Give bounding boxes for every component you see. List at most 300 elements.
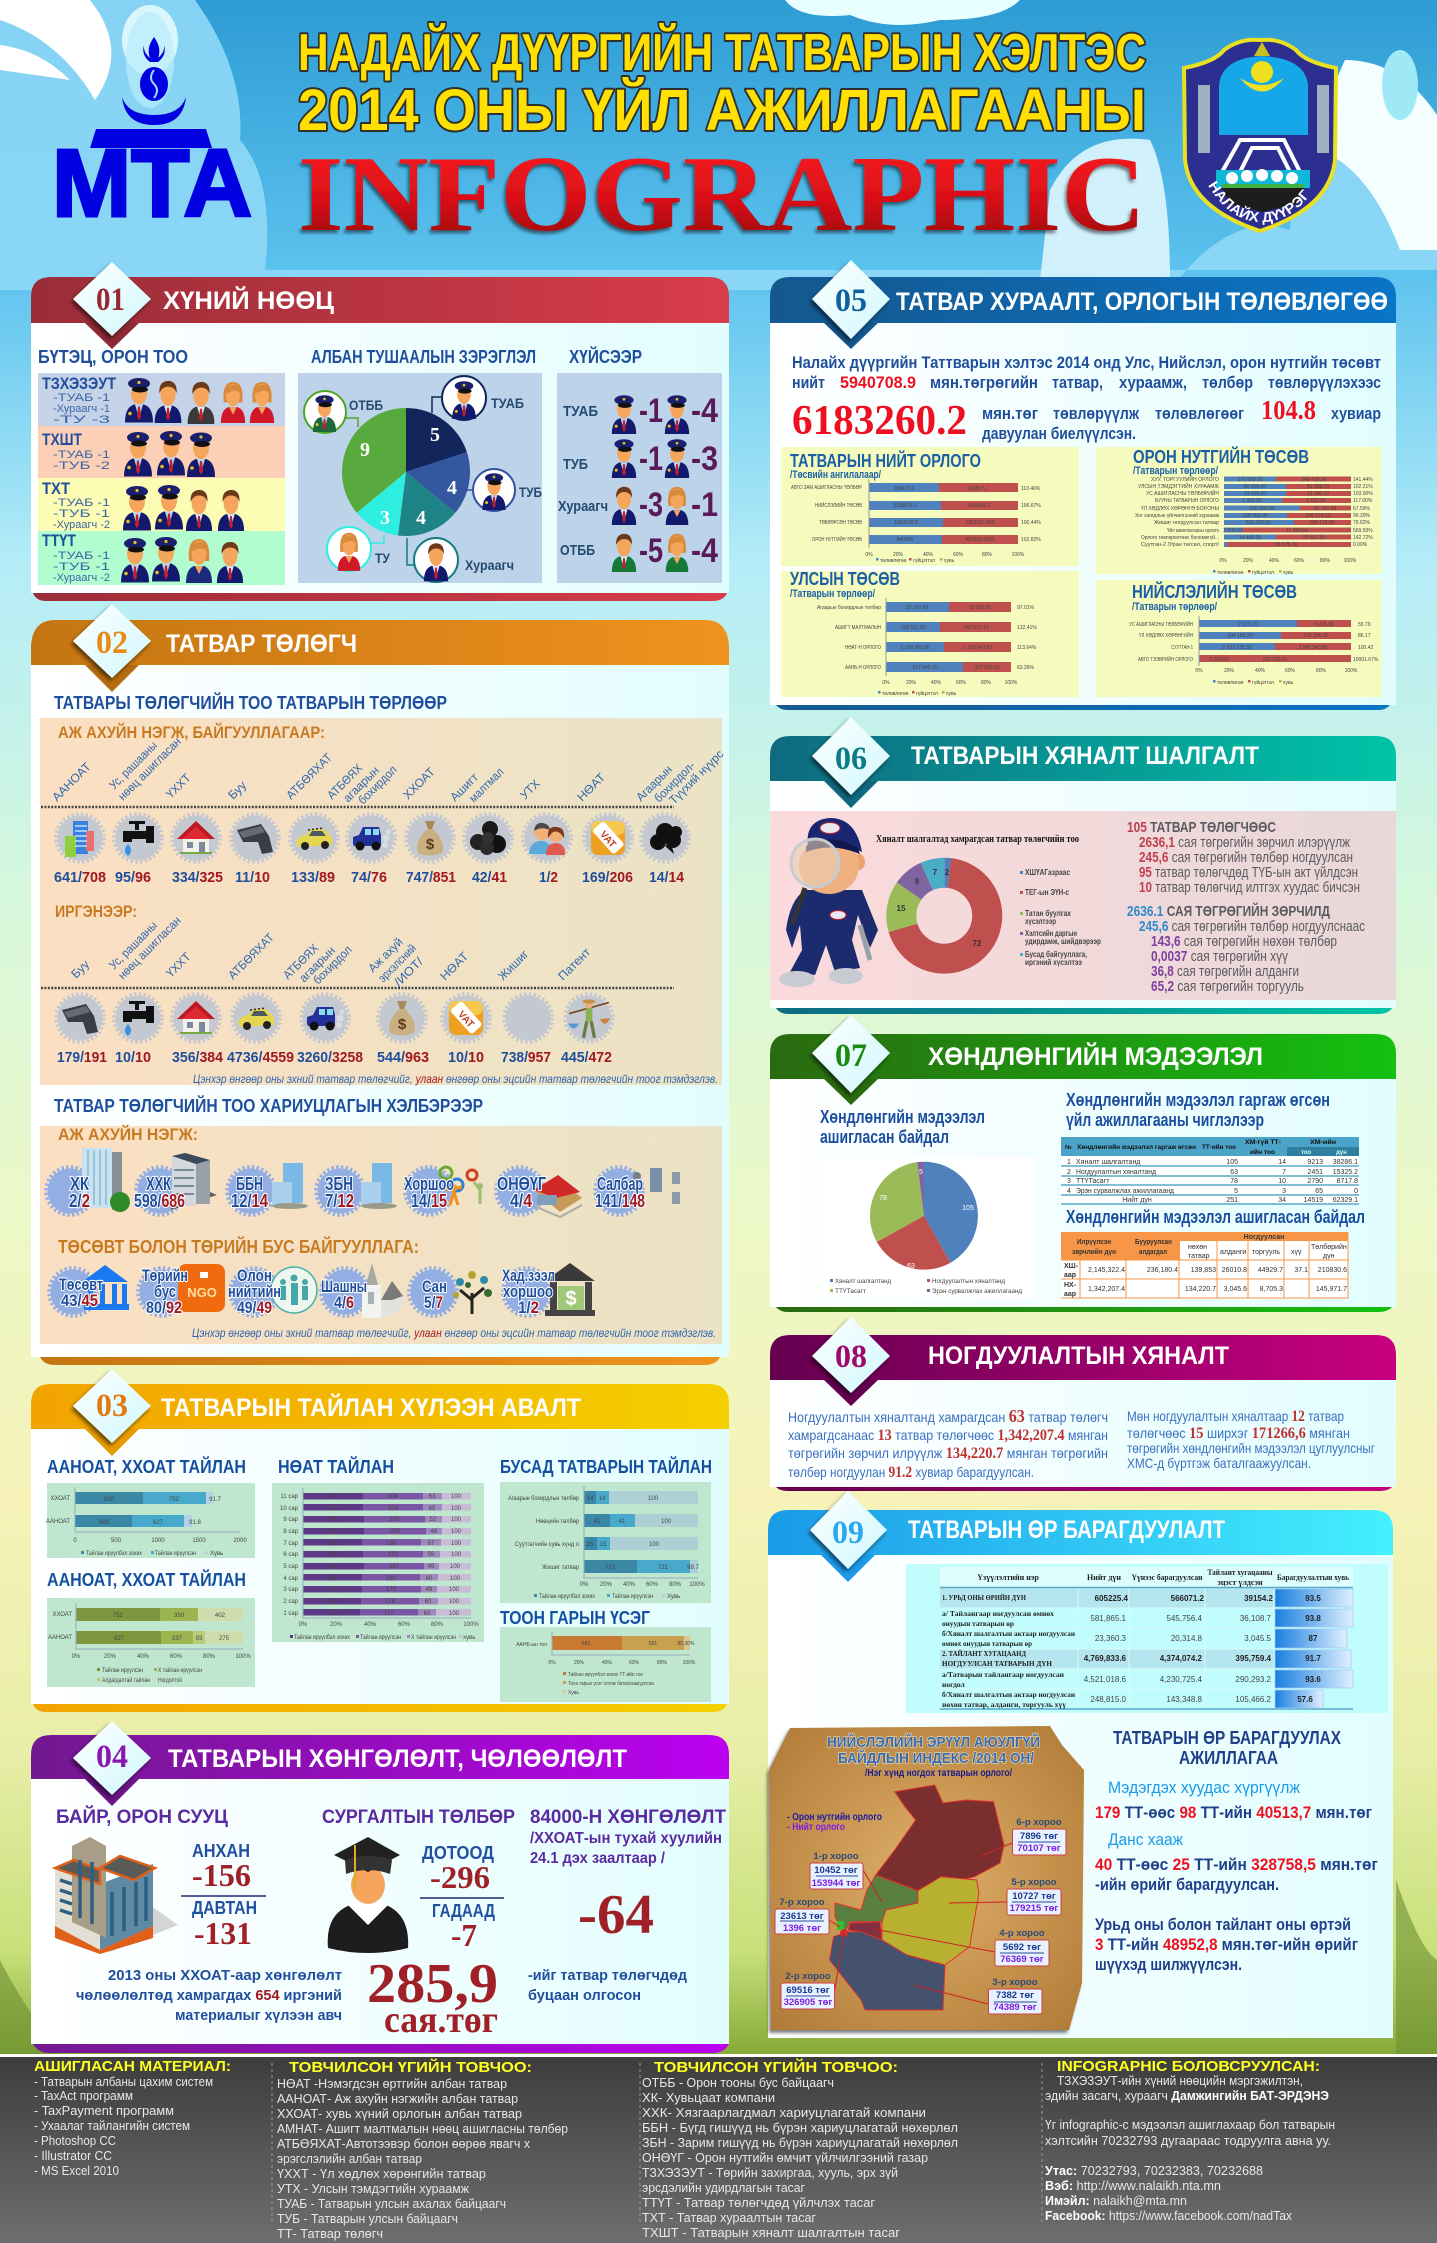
numbers row: citizens: 10/10 [115, 1049, 151, 1066]
donut legend: Бусад байгууллага, [1025, 950, 1087, 959]
chart: state budget: /Татварын төрлөөр/ [790, 588, 875, 600]
rotated tax labels, entities: УТХ [517, 777, 543, 802]
pie chart: information usage: ТТҮТасагт [835, 1289, 866, 1295]
chart: capital city budget: СУУТГАН-1 [1171, 645, 1193, 651]
table: information by direction: Хөндлөнгийн мэдээлэл гаргаж өгсөн [1077, 1144, 1196, 1151]
chart: total tax income: 840000 [897, 537, 914, 543]
table: information by direction: 9213 [1307, 1159, 1323, 1166]
chart: digital signature: 95.30% [678, 1641, 695, 1647]
chart: state budget: 20% [906, 680, 917, 686]
footer: abbreviations column 1: АМНАТ- Ашигт малтмалын нөөц ашигласны төлбөр [277, 2122, 568, 2136]
text: refund description: чөлөөлөлтөд хамрагдах 654 иргэний [76, 1987, 342, 2004]
table: information usage amounts: 26010.8 [1222, 1267, 1247, 1274]
pie chart: information usage [821, 1158, 1036, 1298]
chart: income tax report quality: Ногдолтой [158, 1677, 182, 1684]
chart: local budget [1096, 446, 1382, 576]
rotated tax labels, citizens: /ИОТ/ [391, 954, 426, 989]
text: collection paragraph right [1127, 1408, 1375, 1471]
text: collection paragraph right: төлөгчөөс 15 ширхэг 171266,6 мянган [1127, 1425, 1350, 1442]
chart: VAT reports: Тайлан ирүүлбэл зохих [294, 1634, 350, 1641]
numbers row: citizens: 4736/4559 [227, 1049, 294, 1066]
chart: local budget: Жишиг ногдуулсан татвар [1154, 520, 1219, 526]
donut chart: 15 [897, 904, 906, 913]
icon: apartment building [55, 1837, 178, 1954]
panel 06 heading: ТАТВАРЫН ХЯНАЛТ ШАЛГАЛТ [911, 742, 1259, 770]
chart: VAT reports: 100 [451, 1541, 462, 1547]
icon: NGO [178, 1264, 225, 1312]
rank pie chart panel: 4 [416, 507, 426, 529]
table: information by direction: ТТҮТасагт [1076, 1178, 1110, 1185]
row: ТЗХЭЗЭУТ [42, 374, 274, 426]
table: arrears collection: 4,230,725.4 [1160, 1675, 1203, 1684]
text: collection summary: 5940708.9 [840, 373, 916, 392]
footer: credits and contact: Үг infographic-с мэдээлэл ашиглахаар бол татварын [1045, 2118, 1335, 2132]
chart: VAT reports: 60 [426, 1576, 433, 1582]
chart: local budget: Хог хаягдлын үйлчилгээний хураамж [1135, 512, 1220, 519]
chart: VAT reports: 100 [449, 1611, 460, 1617]
numbers row: entities: 1/2 [539, 869, 558, 886]
table: arrears collection: 23,360.3 [1095, 1634, 1127, 1643]
panel 03: tax reports [31, 1369, 729, 1712]
panel 09 heading: ТАТВАРЫН ӨР БАРАГДУУЛАЛТ [908, 1516, 1225, 1544]
chart: capital city budget: 100% [1345, 668, 1358, 674]
subheading: usage of information [820, 1107, 985, 1147]
table: information by direction: 3 [1282, 1188, 1286, 1195]
rotated tax labels, entities: Буу [225, 778, 249, 802]
note: Цэнхэр өнгөөр оны эхний татвар төлөгчийг, улаан өнгөөр оны эцсийн татвар төлөгчийн тоог тэмдэглэв. [193, 1072, 718, 1086]
portrait: ОТББ [304, 391, 346, 433]
callout: khoroo 4: 76369 төг [1000, 1954, 1044, 1965]
chart: VAT reports: 193 [388, 1552, 399, 1558]
table: information usage amounts: ХШ- [1064, 1263, 1079, 1270]
table: arrears collection: 1. УРЬД ОНЫ ӨРИЙН ДҮН [942, 1593, 1026, 1602]
chart: VAT reports: 6 сар [283, 1552, 299, 1558]
table: arrears collection: 395,759.4 [1235, 1654, 1272, 1663]
subheading: housing: БАЙР, ОРОН СУУЦ [56, 1806, 228, 1828]
chart: total tax income: 102.82% [1021, 537, 1041, 543]
panel 02 number: 02 [96, 625, 128, 661]
gender panel: ОТББ [560, 542, 595, 559]
chart: local budget: 0% [1219, 558, 1227, 564]
portrait: Хураагч [414, 538, 458, 582]
chart: other tax reports: 15 [600, 1542, 607, 1548]
footer: credits and contact [1045, 2058, 1335, 2223]
table: information usage amounts: 3,045.6 [1224, 1286, 1247, 1293]
labels row 1: 141/148 [595, 1191, 645, 1211]
table: information by direction: 2451 [1307, 1169, 1323, 1176]
chart: digital signature: Тоон гарын үсэг олгож баталгаажуулсан [568, 1681, 654, 1687]
footer: abbreviations column 2: ТТҮТ - Татвар төлөгчдөд үйлчлэх тасаг [642, 2196, 875, 2210]
chart: capital city budget: 20% [1224, 668, 1235, 674]
table: information usage amounts: 139,853 [1191, 1267, 1216, 1274]
text: refund description: материалыг хүлээн авч [175, 2007, 342, 2024]
labels row 2: Шашны [321, 1277, 367, 1296]
row: ТЗХЭЗЭУТ: -Хураагч -1 [53, 403, 110, 415]
chart: local budget: 20% [1243, 558, 1254, 564]
footer: materials used: - Photoshop CC [34, 2134, 116, 2148]
row: ТХШТ: -ТУАБ -1 [53, 449, 110, 461]
rotated tax labels, citizens: Жишиг [495, 947, 532, 983]
chart: local budget: 184 172.80 [1309, 520, 1335, 526]
map: tax income per person by khoroo: НИЙСЛЭЛИЙН ЭРҮҮЛ АЮУЛГҮЙ [827, 1733, 1040, 1751]
rotated tax labels, citizens: ҮХХТ [163, 949, 194, 980]
icon: community [271, 1267, 317, 1313]
chart: state budget: 132.41% [1017, 625, 1037, 631]
text: inspection results: 36,8 сая төгрөгийн алданги [1151, 963, 1299, 980]
panel 03 heading: ТАТВАРЫН ТАЙЛАН ХҮЛЭЭН АВАЛТ [161, 1392, 581, 1422]
row: ТХШТ [42, 430, 215, 477]
chart: local budget: ХУУ, ТОРГУУЛИЙН ОРЛОГО [1151, 475, 1219, 483]
chart: other tax reports: 100% [689, 1582, 705, 1588]
chart: state budget: 113.64% [1017, 645, 1037, 651]
chart: other tax reports: 15 [587, 1542, 594, 1548]
subheading: arrears work: ТАТВАРЫН ӨР БАРАГДУУЛАХ [1113, 1728, 1341, 1748]
chart: other tax reports: 60% [646, 1582, 659, 1588]
rotated tax labels, citizens: АТБӨЯХАТ [225, 930, 277, 982]
stat: housing new: -156 [192, 1857, 251, 1893]
subheading: income tax reports 2: ААНОАТ, ХХОАТ ТАЙЛАН [47, 1569, 246, 1590]
footer: credits and contact: эдийн засагч, хураагч Дамжингийн БАТ-ЭРДЭНЭ [1045, 2089, 1329, 2103]
table: arrears collection: 2. ТАЙЛАНТ ХУГАЦААНД [942, 1649, 1027, 1658]
icon: inspector mascot [779, 818, 878, 987]
numbers row: citizens: 544/963 [377, 1049, 429, 1066]
chart: VAT reports: 203 [388, 1506, 399, 1512]
table: information by direction: 7 [1282, 1169, 1286, 1176]
chart: total tax income: НИЙСЛЭЛИЙН ТӨСӨВ [815, 501, 863, 509]
chart: total tax income: 3466409.1 [967, 503, 991, 509]
callout: khoroo 3 [988, 1977, 1042, 2014]
chart: state budget: 108 511.20 [901, 625, 926, 631]
panel 08: collection control [770, 1317, 1396, 1491]
chart: other tax reports: 14 [599, 1496, 606, 1502]
chart: income tax report quality: Х тайлан ирүүлсэн [158, 1667, 202, 1674]
table: arrears collection: 566071.2 [1171, 1594, 1205, 1603]
chart: local budget: 40% [1269, 558, 1280, 564]
chart: local budget: 120 000.00 [1249, 506, 1275, 512]
panel 08 number: 08 [835, 1339, 867, 1375]
numbers row: entities [54, 869, 685, 886]
subheading: VAT reports: НӨАТ ТАЙЛАН [278, 1456, 394, 1477]
rank pie chart panel: 5 [430, 424, 440, 446]
chart: local budget: 20 552.30 [1303, 535, 1325, 541]
table: arrears collection: эцэст үлдсэн [1217, 1578, 1263, 1587]
chart: digital signature [500, 1627, 711, 1702]
note: Цэнхэр өнгөөр оны эхний татвар төлөгчийг, улаан өнгөөр оны эцсийн татвар төлөгчийн тоог тэмдэглэв. [192, 1326, 716, 1340]
callout: khoroo 3: 7382 төг [996, 1990, 1034, 2001]
table: information by direction: Ногдуулалтын хяналтанд [1076, 1169, 1156, 1176]
logo: MTA: МТА [52, 130, 252, 237]
subheading: usage: Хөндлөнгийн мэдээлэл ашигласан байдал [1066, 1207, 1365, 1227]
callout: khoroo 1 [810, 1851, 863, 1889]
chart: VAT reports: 10 сар [280, 1506, 299, 1512]
table: information by direction: 78 [1230, 1178, 1238, 1185]
text: collection summary: төвлөрүүлж [1053, 404, 1140, 423]
text: inspection results: 0,0037 сая төгрөгийн хүү [1151, 948, 1288, 965]
callout: khoroo 6: 70107 төг [1017, 1843, 1061, 1854]
row: ТХШТ: -ТУБ -2 [53, 460, 110, 472]
chart: VAT reports: 182 [328, 1576, 339, 1582]
chart: income tax report quality: 275 [219, 1636, 230, 1642]
stat: 285.9 million: 285,9 [367, 1953, 498, 2015]
footer [0, 2054, 1437, 2243]
stat: tuition [420, 1843, 504, 1953]
chart: local budget: 99.20% [1353, 513, 1371, 519]
chart: capital city budget: 10001.67% [1353, 657, 1379, 663]
callout: khoroo 5 [1007, 1877, 1061, 1915]
footer: abbreviations column 1: эрэгслэлийн албан татвар [277, 2152, 422, 2166]
footer: abbreviations column 1: ХХОАТ- хувь хүний орлогын албан татвар [277, 2107, 522, 2121]
text: inspection results: 245,6 сая төгрөгийн төлбөр ногдуулснаас [1139, 918, 1365, 935]
chart: VAT reports: 193 [328, 1552, 339, 1558]
chart: income tax reports: 1000 [151, 1538, 165, 1544]
chart: local budget: БУУНЫ ТАТВАРЫН ОРЛОГО [1155, 498, 1219, 504]
text: collection paragraph right: төгрөгийн хөндлөнгийн мэдээлэл цуглуулсныг [1127, 1440, 1375, 1456]
labels row 2: Төсөвт [59, 1275, 103, 1294]
table: information by direction: 1 [1067, 1159, 1071, 1166]
chart: digital signature: 683 [582, 1641, 590, 1647]
callout: khoroo 1: 10452 төг [814, 1865, 858, 1876]
table: information usage amounts: Ногдуулсан [1244, 1234, 1284, 1241]
text: inspection results: 105 ТАТВАР ТӨЛӨГЧӨӨС [1127, 819, 1276, 836]
chart: local budget: УЛСЫН ТЭМДЭГТИЙН ХУРААМЖ [1138, 482, 1219, 490]
donut chart: 2 [945, 868, 950, 877]
table: arrears collection: Нийт дүн [1087, 1573, 1121, 1582]
chart: income tax reports: ААНОАТ [46, 1519, 70, 1525]
icon row: citizens [56, 994, 613, 1042]
table: information by direction: 10 [1278, 1178, 1286, 1185]
rotated tax labels, entities: АТБӨЯХ [324, 761, 365, 802]
text: collection paragraph left: төгрөгийн зөрчил илрүүлж 134,220.7 мянган төгрөгийн [788, 1445, 1108, 1462]
chart: state budget: ААНБ-Н ОРЛОГО [845, 665, 881, 671]
stat: 6183260.2: 6183260.2 [792, 398, 967, 444]
labels row 1: 598/686 [134, 1191, 185, 1211]
icon: red roof store [534, 1175, 582, 1217]
icon: gears and people [440, 1167, 483, 1205]
rotated tax labels, citizens: бохирдол [310, 943, 355, 987]
panel 07 heading: ХӨНДЛӨНГИЙН МЭДЭЭЛЭЛ [928, 1041, 1263, 1071]
table: arrears collection: Үзүүлэлтийн нэр [977, 1573, 1039, 1582]
numbers row: entities: 95/96 [115, 869, 151, 886]
subheading: arrears work [1113, 1728, 1341, 1768]
table: information by direction: 62329.1 [1333, 1197, 1358, 1204]
icon: bank [545, 1263, 595, 1316]
subheading: by direction: үйл ажиллагааны чиглэлээр [1066, 1110, 1264, 1130]
chart: income tax reports: 91.7 [209, 1497, 221, 1503]
footer: credits and contact: Facebook: https://www.facebook.com/nadTax [1045, 2209, 1293, 2223]
table: arrears collection: 36,108.7 [1240, 1614, 1272, 1623]
table: information by direction: дүн [1336, 1150, 1347, 1156]
callout: khoroo 1: 1-р хороо [813, 1851, 859, 1862]
chart: local budget: хувь [1283, 570, 1294, 576]
labels row 2: 5/7 [424, 1293, 443, 1312]
pie chart: information usage: Эрэн сурвалжлах ажиллагаанд [932, 1289, 1023, 1295]
rank pie chart panel: 3 [380, 507, 390, 529]
badge backgrounds row 1 [46, 1167, 643, 1215]
numbers row: citizens: 356/384 [172, 1049, 224, 1066]
chart: state budget: НӨАТ-Н ОРЛОГО [845, 645, 881, 651]
table: arrears collection: 143,348.8 [1166, 1695, 1203, 1704]
chart: VAT reports: хувь [463, 1635, 475, 1641]
stat: housing new: АНХАН [192, 1841, 250, 1861]
chart: total tax income: 40% [923, 552, 934, 558]
callout: khoroo 4: 5692 төг [1003, 1942, 1041, 1953]
rank pie chart panel: ТУАБ [491, 395, 524, 411]
chart: VAT reports: 100 [451, 1529, 462, 1535]
chart: income tax report quality: 40% [137, 1654, 150, 1660]
pie chart: information usage: 105 [962, 1205, 974, 1212]
chart: total tax income: 20% [893, 552, 904, 558]
text: arrears actions: Мэдэгдэх хуудас хүргүүлж [1108, 1778, 1301, 1797]
table: information usage amounts: хүү [1291, 1249, 1302, 1256]
table: information usage amounts: аар [1064, 1291, 1076, 1298]
numbers row: citizens [57, 1049, 612, 1066]
chart: state budget: 1 199 282.80 [900, 645, 930, 651]
footer: abbreviations column 2: ТХШТ - Татварын хяналт шалгалтын тасаг [642, 2226, 900, 2240]
callout: khoroo 1: 153944 төг [812, 1878, 860, 1889]
chart: income tax report quality: 752 [113, 1613, 124, 1619]
table: information usage amounts: 37.1 [1294, 1267, 1308, 1274]
subheading: usage of information: ашигласан байдал [820, 1127, 949, 1147]
donut legend [1020, 868, 1101, 967]
chart: income tax reports: 91.8 [189, 1520, 201, 1526]
text: arrears actions [1095, 1778, 1378, 1974]
stat: housing new [181, 1841, 266, 1951]
table: arrears collection: 87 [1309, 1634, 1318, 1643]
chart: total tax income: хувь [944, 558, 955, 564]
chart: state budget: Агаарын бохирдлын төлбөр [817, 605, 881, 611]
chart: capital city budget: 204 165.20 [1227, 633, 1253, 639]
stat: tuition: ГАДААД [432, 1901, 495, 1921]
chart: VAT reports: 100% [463, 1622, 479, 1628]
chart: income tax report quality: 627 [114, 1636, 125, 1642]
chart: other tax reports [500, 1482, 711, 1603]
chart: VAT reports: 203 [328, 1506, 339, 1512]
chart: total tax income: 100.44% [1021, 520, 1041, 526]
footer: abbreviations column 2: ЗБН - Зарим гишүүд нь бүрэн хариуцлагатай нөхөрлөл [642, 2136, 958, 2150]
panel 04 number: 04 [96, 1739, 128, 1775]
chart: VAT reports: 65 [429, 1506, 436, 1512]
rotated tax labels, citizens: агаарын [296, 943, 338, 985]
chart: local budget: төлөвлөгөө [1217, 570, 1244, 576]
chart: VAT reports: 80% [431, 1622, 444, 1628]
text: law reference [530, 1830, 722, 1867]
heading: entities: АЖ АХУЙН НЭГЖ, БАЙГУУЛЛАГААР: [58, 723, 325, 742]
table: arrears collection: 93.6 [1305, 1675, 1321, 1684]
callout: khoroo 6 [1012, 1817, 1066, 1855]
chart: total tax income: гүйцэтгэл [913, 557, 935, 564]
chart: income tax reports: 1500 [192, 1538, 206, 1544]
text: collection summary: хураамж, [1119, 373, 1187, 392]
footer: abbreviations column 1: ААНОАТ- Аж ахуйн нэгжийн албан татвар [277, 2092, 518, 2106]
table: arrears collection: а/Татварын тайлангаар ногдуулсан [942, 1670, 1065, 1679]
panel 04: tax exemptions [31, 1721, 729, 2053]
gender panel: -4 [691, 532, 718, 570]
chart: VAT reports: Х тайлан ирүүлсэн [411, 1634, 456, 1641]
text: collection summary: төлөвлөгөөг [1155, 404, 1244, 423]
table: arrears collection: 3,045.5 [1244, 1634, 1272, 1643]
table: information by direction: 2 [1067, 1169, 1071, 1176]
gender panel: -4 [691, 392, 718, 430]
panel 07: third-party information [770, 1015, 1396, 1312]
text: arrears actions: 179 ТТ-өөс 98 ТТ-ийн 40513,7 мян.төг [1095, 1803, 1372, 1822]
callout: khoroo 4: 4-р хороо [999, 1928, 1045, 1939]
footer: abbreviations column 1: УТХ - Улсын тэмдэгтийн хураамж [277, 2182, 470, 2196]
chart: capital city budget: 60% [1285, 668, 1296, 674]
chart: capital city budget: 220 316.51 [1262, 657, 1288, 663]
chart: income tax reports: 820 [104, 1497, 115, 1503]
text: refund note: -ийг татвар төлөгчдөд [528, 1967, 687, 1984]
chart: state budget: гүйцэтгэл [916, 690, 938, 697]
chart: VAT reports: 20% [330, 1622, 343, 1628]
text: collection paragraph right: ХМС-д бүртгэж баталгаажуулсан. [1127, 1455, 1311, 1471]
footer: abbreviations column 2: ОТББ - Орон тооны бус байцаагч [642, 2076, 834, 2090]
chart: local budget: 141.44% [1353, 477, 1373, 483]
chart: state budget: 327 065.62 [974, 665, 1000, 671]
chart: local budget: 79.62% [1353, 520, 1371, 526]
table: information by direction: Эрэн сурвалжлах ажиллагаанд [1076, 1188, 1174, 1195]
map: tax income per person by khoroo: БАЙДЛЫН ИНДЕКС /2014 ОН/ [838, 1749, 1035, 1767]
numbers row: citizens: 179/191 [57, 1049, 107, 1066]
labels row 1: 7/12 [325, 1191, 354, 1211]
table: information usage amounts: 145,971.7 [1316, 1286, 1347, 1293]
stat: housing new: -131 [194, 1915, 252, 1951]
labels row 2: хоршоо [503, 1282, 553, 1301]
labels row 1: 2/2 [69, 1191, 90, 1211]
table: information by direction: 4 [1067, 1188, 1071, 1195]
labels row 2: 49/49 [237, 1298, 272, 1317]
chart: income tax reports: 752 [169, 1497, 180, 1503]
text: collection summary: нийт [792, 373, 825, 392]
heading: citizens: ИРГЭНЭЭР: [55, 902, 137, 921]
chart: VAT reports: 100 [449, 1599, 460, 1605]
table: arrears collection: өмнөх онуудын татварын өр [942, 1639, 1032, 1648]
chart: local budget: 1 522.00 [1306, 498, 1326, 504]
text: arrears actions: 3 ТТ-ийн 48952,8 мян.төг-ийн өрийг [1095, 1935, 1358, 1954]
chart: digital signature: 100% [683, 1660, 696, 1666]
numbers row: entities: 74/76 [351, 869, 387, 886]
icon: tower building [82, 1148, 130, 1212]
rotated tax labels, entities: нөөц ашигласан [115, 735, 184, 803]
text: arrears actions: шүүхэд шилжүүлсэн. [1095, 1955, 1242, 1974]
rotated tax labels, citizens: Патент [555, 945, 594, 983]
gender panel: -1 [691, 486, 718, 524]
rotated tax labels, entities: АТБӨЯХАТ [283, 750, 335, 802]
chart: capital city budget: АВТО ТЭЭВРИЙН ОРЛОГО [1138, 655, 1193, 663]
subheading: gender: ХҮЙСЭЭР [569, 346, 642, 367]
callout: khoroo 7 [775, 1897, 829, 1934]
footer: abbreviations column 1: АТБӨЯХАТ-Автотээвэр болон өөрөө явагч х [277, 2137, 531, 2151]
chart: other tax reports: Нөөцийн төлбөр [536, 1518, 580, 1525]
labels row 1: Хоршоо [404, 1174, 454, 1194]
stat: 285.9 million: сая.төг [384, 1999, 498, 2041]
gender panel: ТУАБ [563, 403, 598, 420]
table: information by direction: 38286.1 [1333, 1159, 1358, 1166]
chart: income tax reports: Тайлан ирүүлсэн [155, 1550, 196, 1557]
donut legend: Хэлтсийн даргын [1025, 929, 1077, 938]
chart: local budget: 2 000.00 [1223, 528, 1243, 534]
chart: capital city budget: ҮЛ ХӨДЛӨХ ХӨРӨНГИЙН [1139, 631, 1193, 639]
chart: income tax report quality: Алдагдалтай тайлан [102, 1677, 150, 1684]
chart: total tax income: 119817.1 [968, 486, 988, 492]
row: ТТҮТ: ТТҮТ [42, 531, 77, 550]
chart: VAT reports: 196 [328, 1541, 339, 1547]
table: information usage amounts: 8,705.3 [1260, 1286, 1283, 1293]
rotated tax labels, entities: НӨАТ [574, 770, 609, 804]
chart: local budget: 80% [1320, 558, 1331, 564]
panel 05: tax collection [770, 260, 1396, 710]
icon: graduate [328, 1837, 408, 1953]
chart: VAT reports: 100 [451, 1506, 462, 1512]
